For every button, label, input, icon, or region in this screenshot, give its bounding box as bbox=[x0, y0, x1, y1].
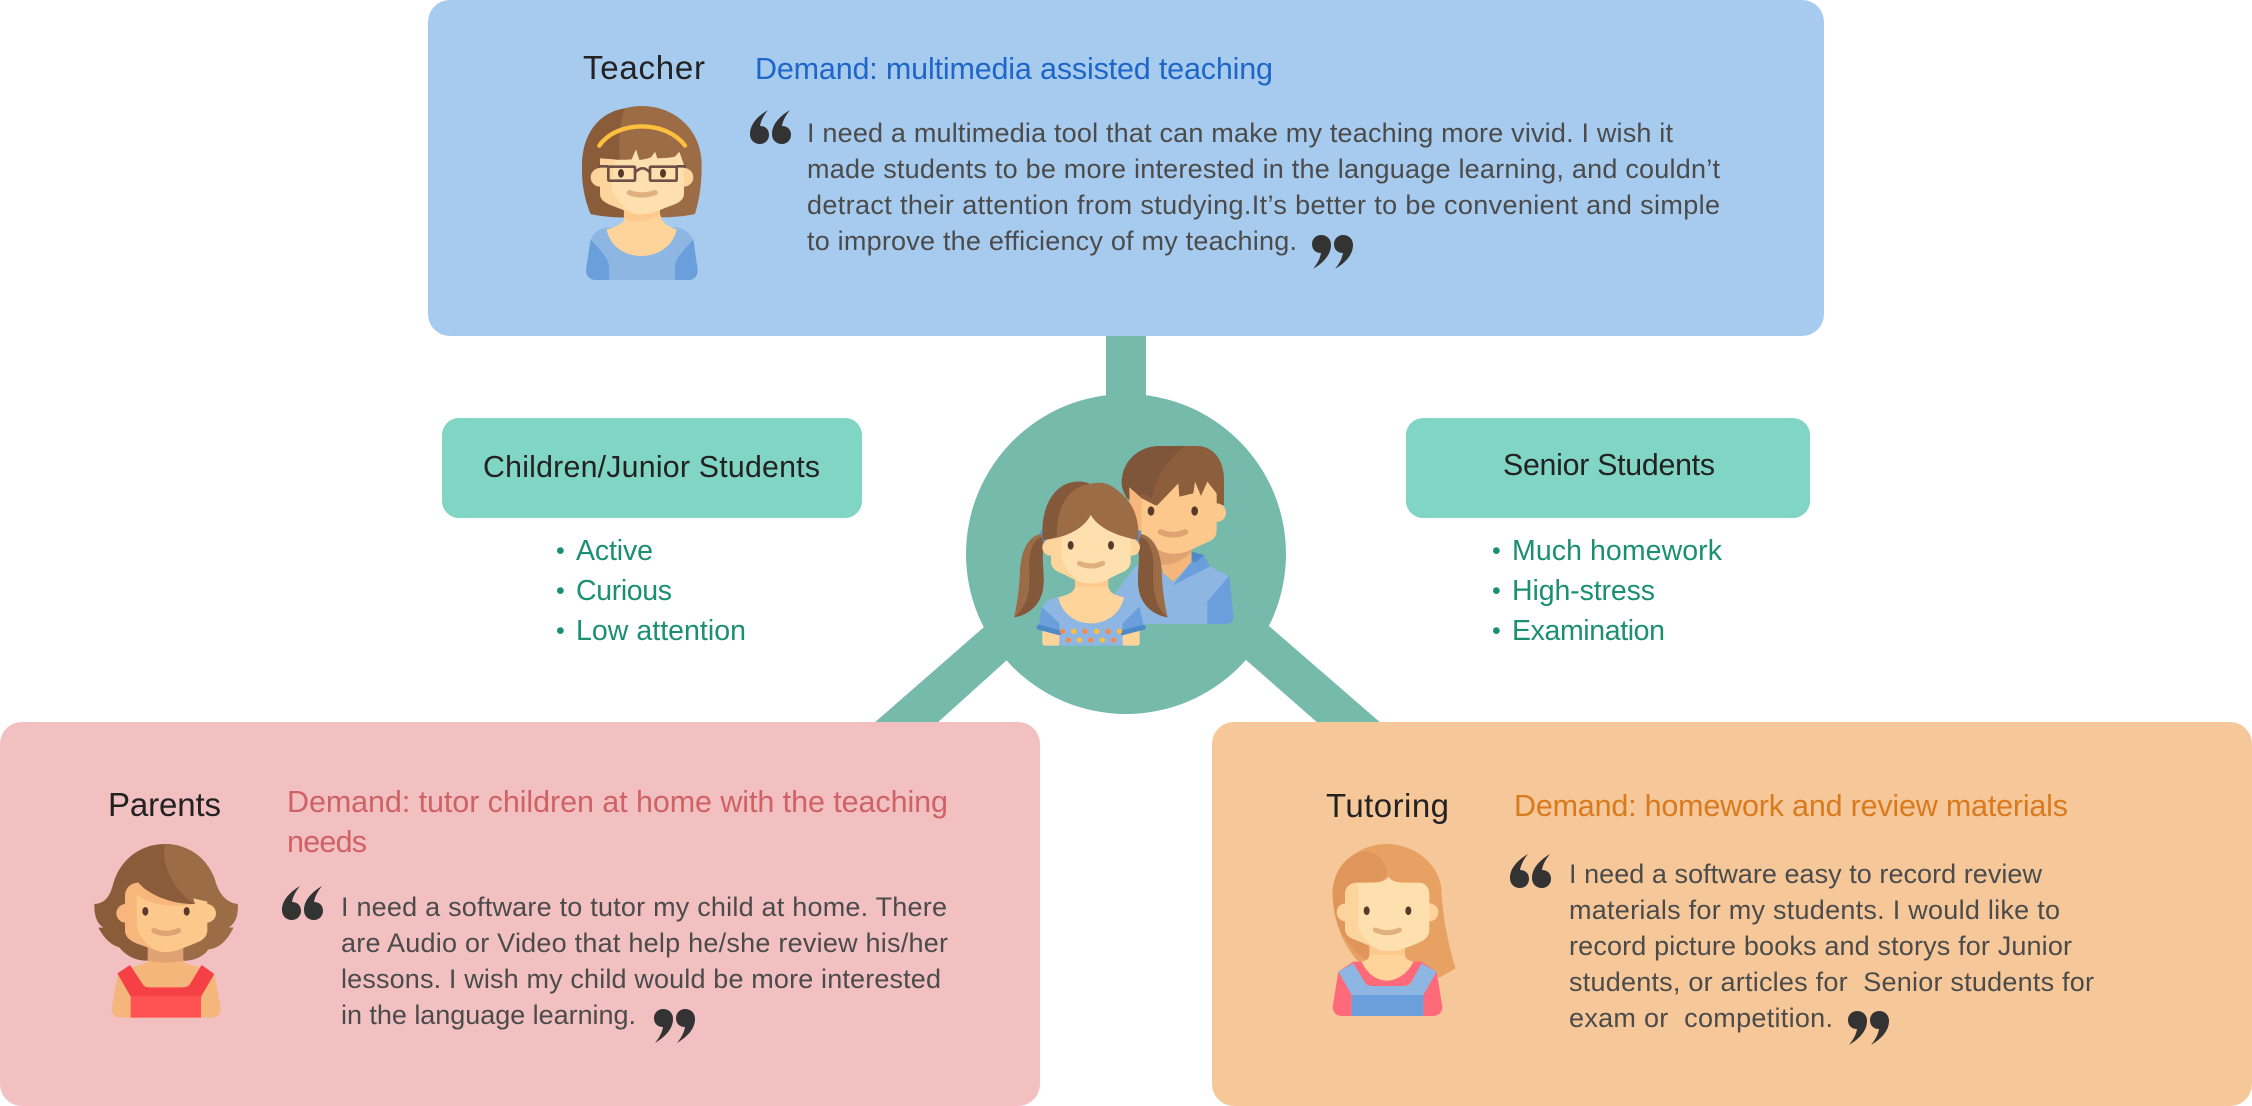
heading: teacher: Teacher bbox=[583, 49, 705, 86]
demand: parents bbox=[287, 785, 948, 859]
connector: leg to tutoring panel bbox=[1246, 626, 1382, 724]
label: children and junior students: Children/Junior Students bbox=[483, 451, 820, 484]
quote text: tutoring: exam or competition. bbox=[1569, 1003, 1833, 1033]
list: senior traits: Examination bbox=[1512, 615, 1665, 647]
label: senior students: Senior Students bbox=[1503, 449, 1715, 482]
connector: stem to teacher panel bbox=[1106, 330, 1146, 410]
list: children traits: Active bbox=[576, 535, 653, 567]
quote text: teacher: detract their attention from studying.It’s better to be convenient and simple bbox=[807, 190, 1720, 220]
list: children traits bbox=[556, 535, 746, 647]
quote text: parents: in the language learning. bbox=[341, 1000, 636, 1030]
panel: children and junior students bbox=[442, 418, 862, 518]
list: children traits: Curious bbox=[576, 575, 672, 607]
quote text: parents: are Audio or Video that help he/she review his/her bbox=[341, 928, 948, 958]
heading: parents: Parents bbox=[108, 786, 221, 823]
connector: leg to parents panel bbox=[873, 627, 1007, 724]
quote text: tutoring: students, or articles for Senior students for bbox=[1569, 967, 2094, 997]
icon: parent avatar bbox=[94, 844, 238, 1018]
quote text: teacher: made students to be more interested in the language learning, and couldn’t bbox=[807, 154, 1720, 184]
central circle bbox=[966, 394, 1286, 714]
quote text: parents: I need a software to tutor my child at home. There bbox=[341, 892, 947, 922]
list: senior traits: High-stress bbox=[1512, 575, 1655, 607]
quote text: parents bbox=[341, 892, 948, 1030]
icon: closing quote bbox=[654, 1009, 695, 1043]
panel: parents bbox=[0, 722, 1040, 1106]
demand: parents: needs bbox=[287, 825, 367, 859]
panel: tutoring bbox=[1212, 722, 2252, 1106]
icon: closing quote bbox=[1312, 235, 1353, 269]
icon: boy and girl students bbox=[1014, 446, 1233, 646]
quote text: teacher: I need a multimedia tool that can make my teaching more vivid. I wish it bbox=[807, 118, 1673, 148]
icon: tutor avatar bbox=[1333, 844, 1456, 1016]
list: children traits: Low attention bbox=[576, 615, 746, 647]
list: children traits: • bbox=[556, 537, 565, 565]
panel: teacher bbox=[428, 0, 1824, 336]
demand: parents: Demand: tutor children at home with the teaching bbox=[287, 785, 948, 819]
list: senior traits bbox=[1492, 535, 1723, 647]
icon: teacher avatar bbox=[582, 106, 702, 280]
quote text: parents: lessons. I wish my child would be more interested bbox=[341, 964, 941, 994]
panel: senior students bbox=[1406, 418, 1810, 518]
icon: opening quote bbox=[282, 886, 323, 920]
icon: closing quote bbox=[1848, 1011, 1889, 1045]
quote text: teacher bbox=[807, 118, 1720, 256]
list: senior traits: Much homework bbox=[1512, 535, 1723, 567]
demand: teacher: Demand: multimedia assisted teaching bbox=[755, 52, 1273, 86]
quote text: tutoring: materials for my students. I would like to bbox=[1569, 895, 2060, 925]
heading: tutoring: Tutoring bbox=[1326, 787, 1449, 824]
list: children traits: • bbox=[556, 617, 565, 645]
demand: tutoring: Demand: homework and review materials bbox=[1514, 789, 2068, 823]
quote text: teacher: to improve the efficiency of my teaching. bbox=[807, 226, 1297, 256]
icon: opening quote bbox=[750, 110, 791, 144]
list: senior traits: • bbox=[1492, 617, 1501, 645]
quote text: tutoring: I need a software easy to record review bbox=[1569, 859, 2042, 889]
list: senior traits: • bbox=[1492, 537, 1501, 565]
list: senior traits: • bbox=[1492, 577, 1501, 605]
quote text: tutoring bbox=[1569, 859, 2094, 1033]
list: children traits: • bbox=[556, 577, 565, 605]
icon: opening quote bbox=[1510, 854, 1551, 888]
quote text: tutoring: record picture books and storys for Junior bbox=[1569, 931, 2072, 961]
